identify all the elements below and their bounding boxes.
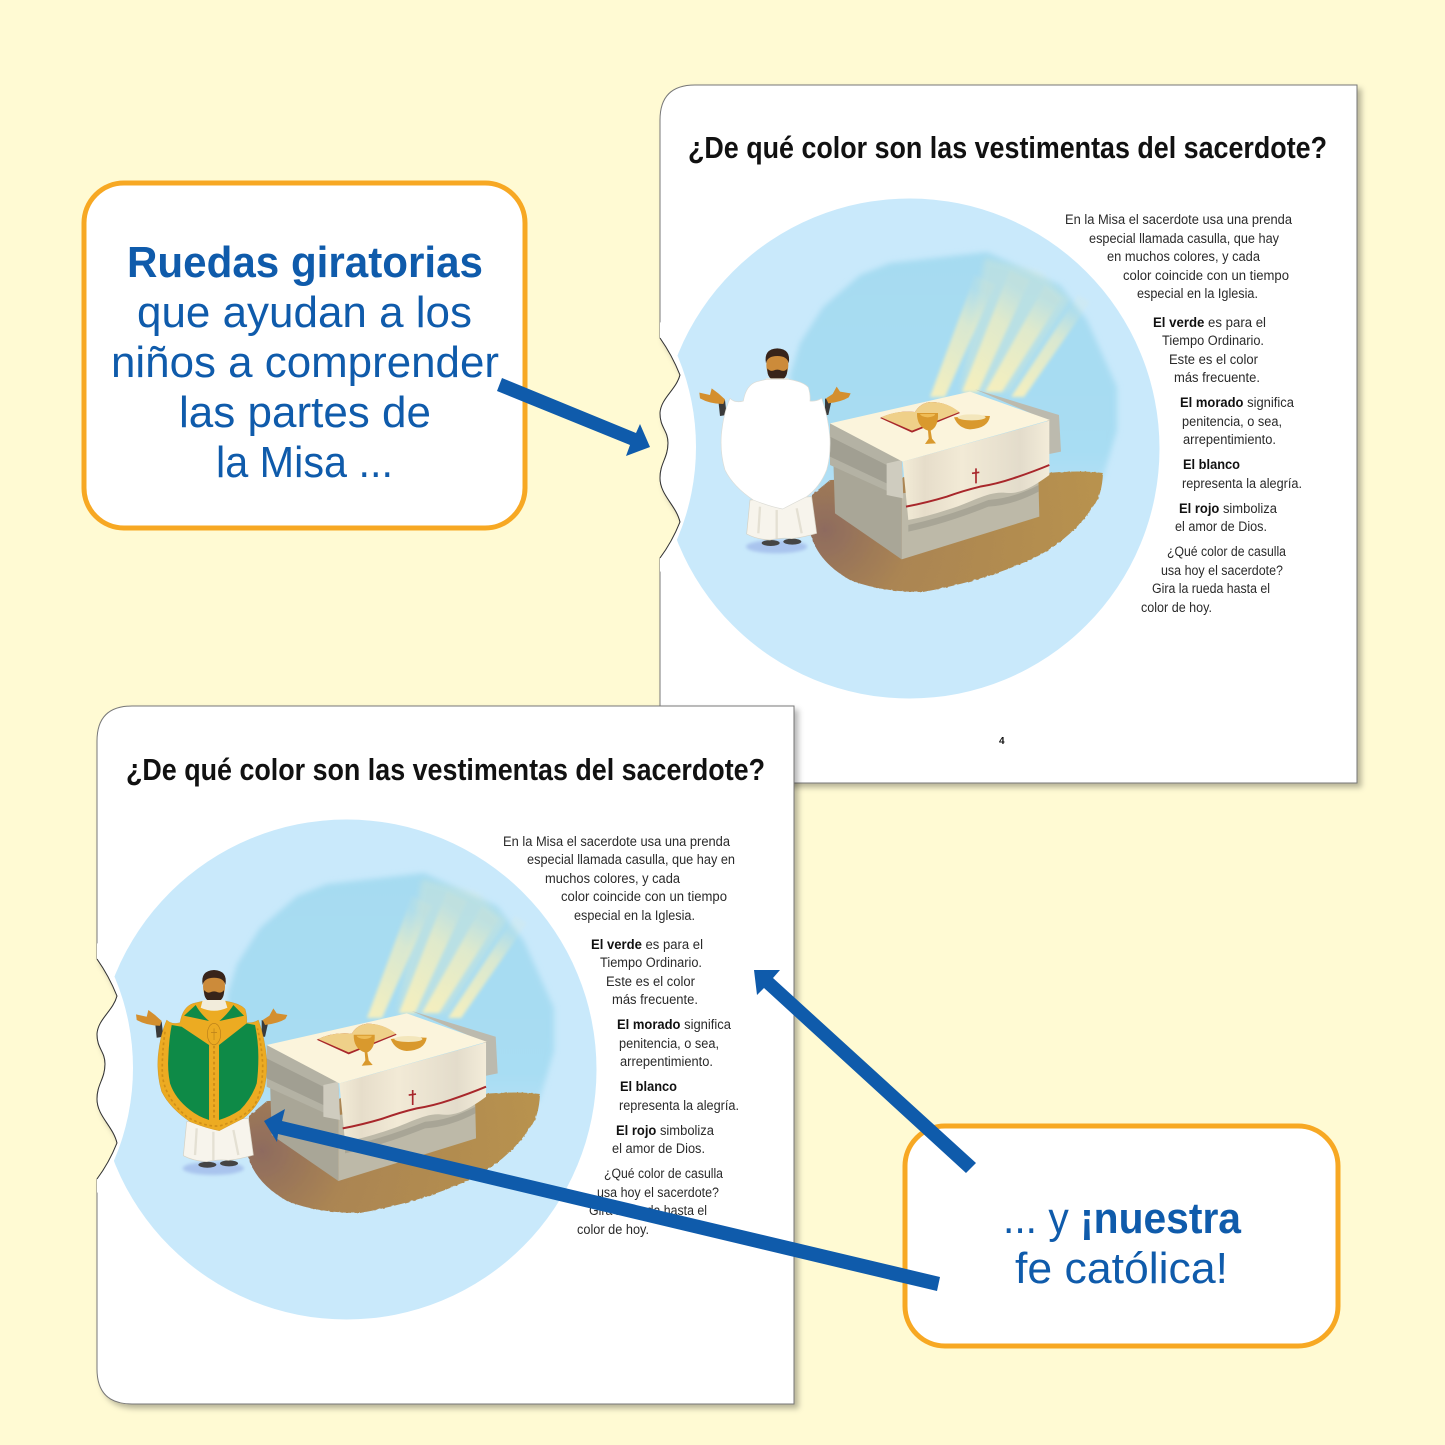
callout: ruedas giratorias: las partes de xyxy=(179,388,431,437)
arrow: callout to green chasuble xyxy=(264,1109,940,1291)
text block: top page body: el amor de Dios. xyxy=(1175,519,1267,534)
text block: top page body: color coincide con un tiempo xyxy=(1123,268,1289,283)
text block: bottom page body: especial en la Iglesia. xyxy=(574,908,695,923)
illustration: blue circle with altar floor and rays xyxy=(96,820,596,1320)
callout: ruedas giratorias: la Misa ... xyxy=(216,438,393,487)
callout: ruedas giratorias: Ruedas giratorias xyxy=(127,238,483,287)
text block: bottom page body: muchos colores, y cada xyxy=(545,871,680,886)
text block: top page body: arrepentimiento. xyxy=(1183,432,1276,447)
text block: top page body: El rojo simboliza xyxy=(1179,501,1277,516)
text block: top page body: El verde es para el xyxy=(1153,315,1266,330)
text block: bottom page body: penitencia, o sea, xyxy=(619,1036,719,1051)
text block: top page body: color de hoy. xyxy=(1141,600,1212,615)
text block: top page body: especial en la Iglesia. xyxy=(1137,286,1258,301)
text block: bottom page body: Gira la rueda hasta el xyxy=(589,1203,707,1218)
heading: top page title: ¿De qué color son las vestimentas del sacerdote? xyxy=(688,130,1327,165)
callout: ruedas giratorias: niños a comprender xyxy=(111,338,499,387)
text block: bottom page body: ¿Qué color de casulla xyxy=(604,1166,723,1181)
page number: 4 xyxy=(999,736,1005,747)
text block: bottom page body: El blanco xyxy=(620,1079,677,1094)
text block: top page body: especial llamada casulla, que hay xyxy=(1089,231,1279,246)
text block: top page body: El morado significa xyxy=(1180,395,1294,410)
text block: bottom page body: representa la alegría. xyxy=(619,1098,739,1113)
text block: bottom page body: En la Misa el sacerdote usa una prenda xyxy=(503,834,730,849)
text block: top page body: representa la alegría. xyxy=(1182,476,1302,491)
text block: bottom page body: Tiempo Ordinario. xyxy=(600,955,702,970)
text block: bottom page body: color coincide con un tiempo xyxy=(561,889,727,904)
text block: bottom page body: color de hoy. xyxy=(577,1222,649,1237)
text block: bottom page body: arrepentimiento. xyxy=(620,1054,713,1069)
callout: nuestra fe catolica: fe católica! xyxy=(1015,1244,1228,1293)
arrow: callout to bottom page text xyxy=(754,970,976,1173)
text block: bottom page body: el amor de Dios. xyxy=(612,1141,705,1156)
text block: bottom page body: especial llamada casulla, que hay en xyxy=(527,852,735,867)
text block: top page body: Gira la rueda hasta el xyxy=(1152,581,1270,596)
heading: bottom page title: ¿De qué color son las vestimentas del sacerdote? xyxy=(126,752,765,787)
text block: top page body: Este es el color xyxy=(1169,352,1258,367)
text block: top page body: ¿Qué color de casulla xyxy=(1167,544,1286,559)
text block: top page body: en muchos colores, y cada xyxy=(1107,249,1260,264)
arrow: callout to top page wheel xyxy=(497,378,650,456)
callout: ruedas giratorias xyxy=(84,183,525,528)
icon: blank white chasuble xyxy=(721,379,830,509)
illustration: altar with book, chalice and bowl xyxy=(830,389,1061,559)
text block: top page body: En la Misa el sacerdote usa una prenda xyxy=(1065,212,1292,227)
illustration: priest wearing green chasuble xyxy=(136,970,287,1175)
text block: top page body: más frecuente. xyxy=(1174,370,1260,385)
text block: bottom page body: El verde es para el xyxy=(591,937,703,952)
text block: top page body: penitencia, o sea, xyxy=(1182,414,1282,429)
text block: bottom page body: Este es el color xyxy=(606,974,695,989)
text block: bottom page body: más frecuente. xyxy=(612,992,698,1007)
illustration: altar with book, chalice and bowl xyxy=(267,1011,498,1181)
text block: top page body: El blanco xyxy=(1183,457,1240,472)
panel: top book page xyxy=(660,84,1365,791)
callout: nuestra fe catolica xyxy=(905,1126,1338,1346)
callout: ruedas giratorias: que ayudan a los xyxy=(137,288,472,337)
illustration: priest figure xyxy=(699,348,851,553)
illustration: blue circle with altar floor and rays xyxy=(660,198,1160,698)
text block: top page body: Tiempo Ordinario. xyxy=(1162,333,1264,348)
text block: bottom page body xyxy=(503,834,739,1237)
text block: top page body: usa hoy el sacerdote? xyxy=(1161,563,1283,578)
callout: nuestra fe catolica: ... y ¡nuestra xyxy=(1003,1194,1241,1243)
panel: bottom book page xyxy=(96,706,802,1412)
text block: top page body xyxy=(1065,212,1302,615)
text block: bottom page body: El morado significa xyxy=(617,1017,731,1032)
text block: bottom page body: usa hoy el sacerdote? xyxy=(597,1185,719,1200)
text block: bottom page body: El rojo simboliza xyxy=(616,1123,714,1138)
